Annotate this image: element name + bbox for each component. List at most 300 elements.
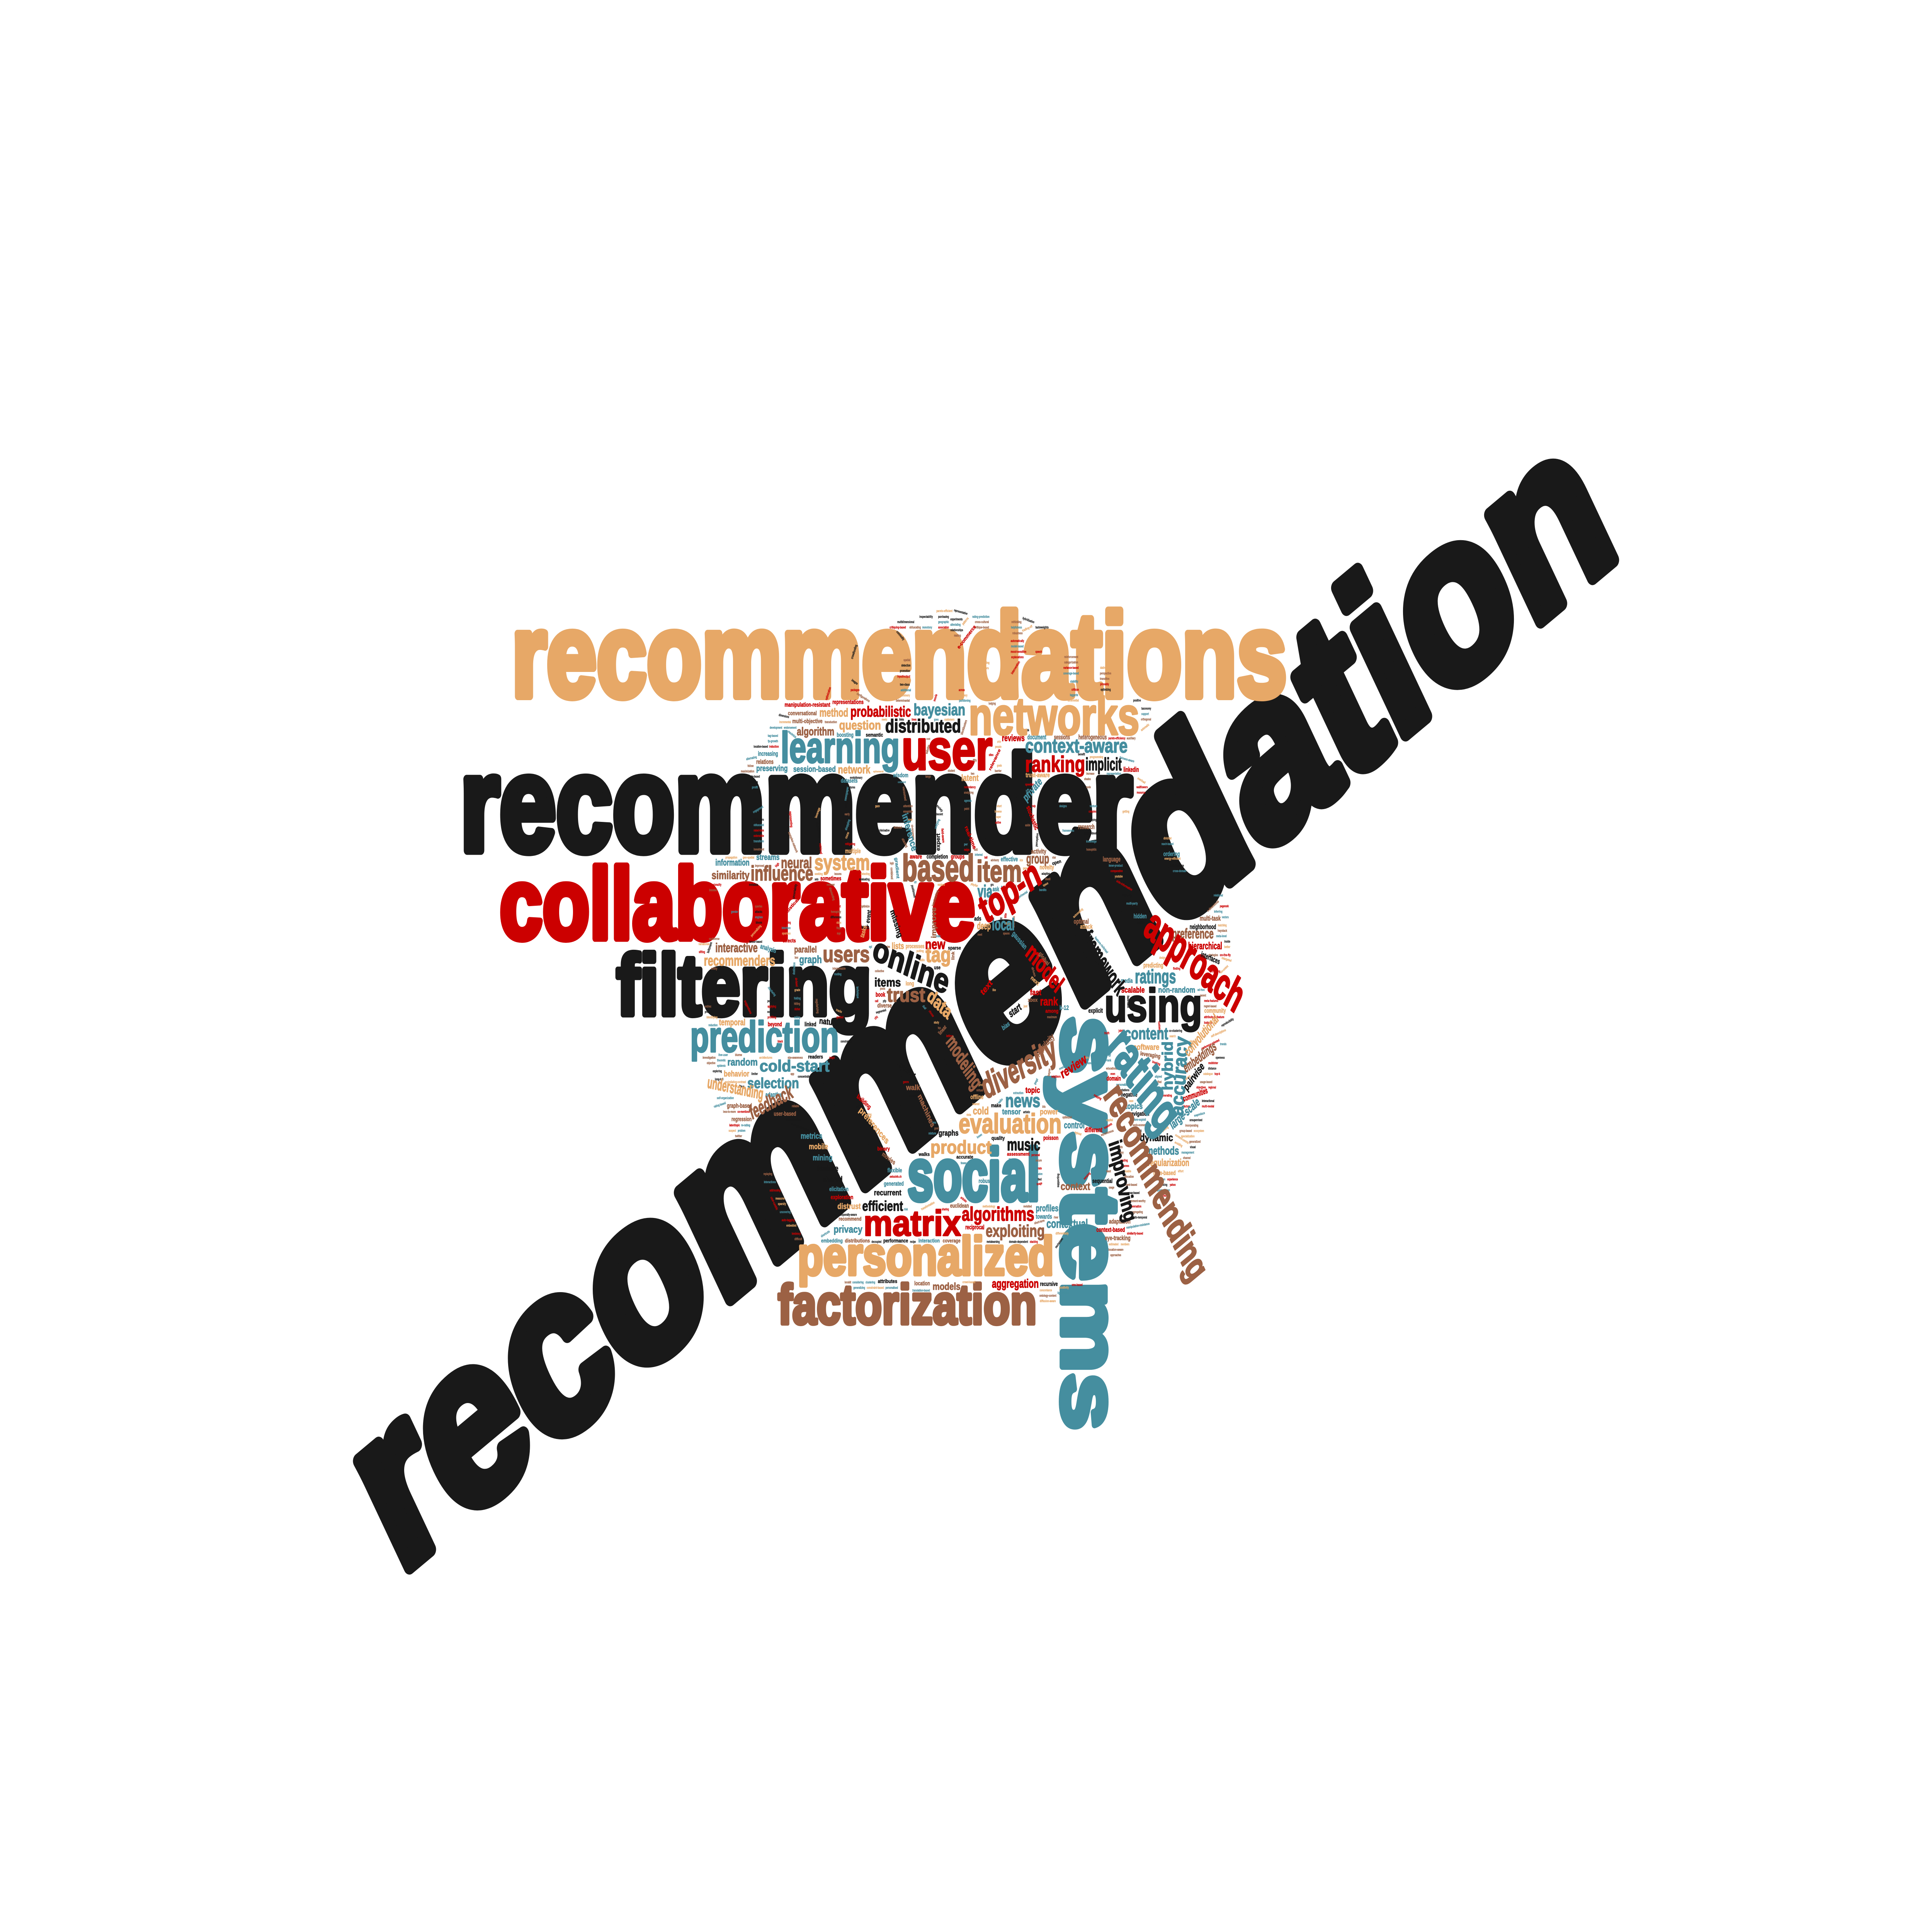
word cloud: small words, upper left: differences xyxy=(830,915,841,919)
word: dynamic: dynamic xyxy=(1140,1132,1173,1143)
word cloud: small words, lower right: known xyxy=(976,1133,983,1139)
word cloud: small words, upper left: mpr xyxy=(837,932,841,935)
word cloud: small words, upper right: hidden xyxy=(1134,913,1147,920)
word: start: start xyxy=(1007,1001,1023,1020)
word cloud: small words, upper left: attacking xyxy=(901,837,909,848)
word cloud: small words, lower right: navigation xyxy=(1129,1111,1149,1117)
word cloud: small words, upper left: monotony xyxy=(922,625,932,629)
word cloud: small words, upper left: meta-product xyxy=(844,793,852,808)
word cloud: small words, upper right: gru xyxy=(991,883,994,887)
word cloud: small words, upper left: sets xyxy=(815,877,818,881)
word cloud: small words, upper right: multi-task xyxy=(1200,915,1221,922)
word: ranking: ranking xyxy=(1025,752,1085,777)
word cloud: small words, upper left: lessons xyxy=(834,872,842,876)
word cloud: small words, lower right: short-term xyxy=(1034,1218,1045,1225)
word cloud: small words, upper left: effects xyxy=(783,937,796,944)
word: gaussian: gaussian xyxy=(1011,929,1028,951)
word cloud: small words, upper right: getting xyxy=(1122,810,1129,813)
word cloud: small words, lower right: customary xyxy=(1158,1021,1162,1033)
word cloud: small words, lower right: interactional xyxy=(1202,1099,1214,1103)
word cloud: small words, lower right: socio-economic xyxy=(1133,1123,1148,1127)
word: influence: influence xyxy=(751,862,813,885)
word cloud: small words, upper right: bandits xyxy=(1039,888,1046,892)
word: non-random: non-random xyxy=(1158,985,1195,995)
word cloud: small words, lower left: regression xyxy=(731,1116,752,1123)
word cloud: small words, lower left: blurme xyxy=(735,1053,742,1057)
word cloud: small words, upper right: energy-efficient xyxy=(1164,857,1180,861)
word cloud: small words, upper right: dwell xyxy=(1045,877,1051,881)
word: regularization: regularization xyxy=(1148,1157,1189,1168)
word cloud: small words, lower right: joint xyxy=(1118,1029,1123,1032)
word cloud: small words, lower right: factors xyxy=(1184,1104,1190,1108)
word cloud: small words, lower right: estimated xyxy=(1109,1242,1119,1246)
word cloud: small words, upper right: frameworks xyxy=(1063,828,1074,832)
word cloud: small words, lower right: games xyxy=(1123,1164,1129,1168)
word cloud: small words, upper left: homophily xyxy=(831,910,841,914)
word cloud: small words, upper left: personalizing xyxy=(750,924,762,937)
word cloud: small words, lower right: context-based xyxy=(1096,1226,1125,1233)
word: scalable: scalable xyxy=(1121,985,1145,995)
word cloud: small words, upper left: inspectability xyxy=(919,615,933,619)
word cloud: small words, lower right: preference-oriented xyxy=(1201,1038,1220,1051)
word cloud: small words, lower right: artistic xyxy=(1023,1110,1030,1114)
word cloud: small words, upper right: experimental xyxy=(1015,890,1028,900)
word cloud: small words, upper right: research xyxy=(1078,823,1095,831)
word cloud: small words, lower right: pairs xyxy=(1084,1055,1089,1060)
word cloud: small words, lower left: link xyxy=(951,951,956,960)
word cloud: small words, lower right: regional xyxy=(1208,1085,1216,1089)
word cloud: small words, lower right: regret-based xyxy=(1204,1004,1216,1008)
word cloud: small words, lower right: channel xyxy=(1183,1156,1190,1160)
word cloud: small words, lower left: rating-based xyxy=(713,1101,726,1109)
word cloud: small words, upper left: automatically xyxy=(1011,639,1024,643)
word cloud: small words, upper right: help xyxy=(1032,804,1036,808)
word: communities: communities xyxy=(1182,1086,1209,1104)
word cloud: small words, upper left: trading-off xyxy=(1021,624,1033,633)
word cloud: small words, lower right: nearest xyxy=(973,1102,980,1106)
word cloud: small words, upper left: optimization xyxy=(824,687,832,701)
word cloud: small words, lower right: ad-hoc xyxy=(1197,988,1205,992)
word cloud: small words, lower left: putting xyxy=(917,949,924,953)
word cloud: small words, upper right: goals xyxy=(997,763,1002,767)
word: system: system xyxy=(815,850,870,875)
word cloud: small words, lower left: limiter xyxy=(752,1072,758,1076)
word cloud: small words, upper left: seeking xyxy=(815,872,823,876)
word cloud: small words, lower right: towards xyxy=(1036,1213,1052,1220)
word cloud: small words, upper right: taxonomy xyxy=(1141,706,1151,711)
word cloud: small words, lower right: effort xyxy=(1178,1169,1184,1173)
word cloud: small words, lower left: tendency xyxy=(792,1231,801,1236)
word cloud: small words, lower right: location-aware xyxy=(1108,1247,1123,1252)
word cloud: small words, lower left: self-organization xyxy=(717,1096,734,1100)
word cloud: small words, lower left: genre xyxy=(903,1080,909,1084)
word: next: next xyxy=(1030,974,1041,987)
word cloud: small words, lower right: catalogue xyxy=(1203,1072,1213,1076)
word cloud: small words, upper left: classification xyxy=(815,822,822,838)
word cloud: small words, upper right: people xyxy=(995,745,1002,749)
word cloud: small words, lower right: valuable xyxy=(1123,1169,1131,1173)
word: review: review xyxy=(1059,1052,1088,1082)
word: cold-start: cold-start xyxy=(760,1057,830,1075)
word: rank: rank xyxy=(1040,995,1058,1008)
word cloud: small words, upper left: increasing xyxy=(758,750,778,757)
word cloud: small words, lower left: tracks xyxy=(835,1008,843,1014)
word cloud: small words, lower left: mixture xyxy=(929,1131,936,1135)
word cloud: small words, upper left: spatial xyxy=(903,658,910,662)
word: filtering: filtering xyxy=(616,937,871,1033)
word cloud: small words, lower left: city xyxy=(873,1015,879,1020)
word cloud: small words, upper left: mitigating xyxy=(845,842,855,846)
word cloud: small words, upper right: youtube xyxy=(1115,874,1123,878)
word cloud: small words, lower left: regularizing xyxy=(815,998,820,1014)
word: temporal: temporal xyxy=(719,1017,745,1027)
word cloud: small words, lower right: generalized xyxy=(1189,1139,1201,1144)
word cloud: small words, upper left: wisdom xyxy=(893,772,908,779)
word cloud: small words, upper left: additional xyxy=(901,688,911,692)
word cloud: small words, upper left: combined xyxy=(890,867,894,879)
word cloud: small words, upper left: vacuumed xyxy=(902,786,908,801)
word: mobile: mobile xyxy=(809,1143,828,1151)
word cloud: small words, lower right: item-based xyxy=(1153,1170,1176,1177)
word cloud: small words, upper right: node xyxy=(1086,785,1091,789)
word cloud: small words, lower right xyxy=(959,966,1235,1303)
word cloud: small words, upper right: debiasing xyxy=(1122,893,1132,897)
word cloud: small words, upper left: two-class xyxy=(900,682,910,686)
word cloud: small words, lower right: methodology xyxy=(983,1204,995,1208)
word cloud: small words, lower left: products xyxy=(705,1010,713,1014)
word: implicit: implicit xyxy=(1085,754,1122,774)
word cloud: small words, lower right: truth xyxy=(1104,1031,1109,1035)
word cloud: small words, upper left: explore xyxy=(938,883,945,886)
word cloud: small words, lower left: suggestions xyxy=(743,1000,753,1015)
word cloud: small words, lower right: experience xyxy=(1167,1177,1178,1181)
word: matrix: matrix xyxy=(864,1203,961,1243)
word cloud: small words, upper right: differential xyxy=(1068,698,1079,702)
word: embeddings: embeddings xyxy=(1181,1038,1218,1076)
word cloud: small words, lower right: robust xyxy=(979,1178,991,1185)
word cloud: small words, lower left: user-centric xyxy=(770,1196,779,1211)
word cloud: small words, lower left: interaction xyxy=(918,1237,940,1243)
word cloud: small words, lower left: guided xyxy=(837,1015,844,1019)
word cloud: small words, upper right: star xyxy=(1052,855,1056,859)
word cloud: small words, lower left: study xyxy=(934,1020,939,1024)
word cloud: small words, upper left: configurations xyxy=(856,692,871,703)
word cloud: small words, upper right: comparative xyxy=(1111,869,1123,873)
word cloud: small words, upper right: domain-aware xyxy=(1170,864,1184,867)
word cloud: small words, upper left: commodity xyxy=(895,630,905,641)
word cloud: small words, upper right: side-information xyxy=(1116,879,1133,892)
word cloud: small words, lower right: talking xyxy=(1135,1128,1141,1133)
word cloud: small words, lower left: ale-based xyxy=(794,978,799,987)
word cloud: small words, lower right: lightweight xyxy=(1058,1291,1069,1295)
word cloud: small words, lower right: assignment xyxy=(1088,1061,1099,1065)
word cloud: small words, lower left: exploration xyxy=(831,1194,853,1201)
word: software: software xyxy=(1133,1043,1159,1052)
word cloud: small words, upper left: tasteweights xyxy=(1036,625,1049,629)
word: recommending: recommending xyxy=(1097,1075,1216,1289)
word: methods: methods xyxy=(1146,1145,1179,1157)
word cloud: small words, lower right: poisson xyxy=(1043,1135,1058,1141)
word cloud: small words, lower left: swissinfo.ch xyxy=(889,1175,901,1179)
word cloud: small words, upper right: venture xyxy=(1090,804,1097,808)
word: exploiting: exploiting xyxy=(986,1222,1045,1240)
word cloud: small words, lower right: spotting xyxy=(1160,1125,1169,1133)
word cloud: small words, upper left: making xyxy=(954,633,961,637)
word cloud: small words, lower right: maximum xyxy=(1047,1015,1057,1019)
word cloud: small words, upper right: perspective xyxy=(1100,671,1111,675)
word cloud: small words, lower right: budgets xyxy=(1204,1020,1212,1024)
word: new: new xyxy=(925,937,946,952)
word cloud: small words, lower left: embedding xyxy=(821,1237,843,1243)
word: neural: neural xyxy=(781,855,812,872)
word cloud: small words, lower left: technique xyxy=(855,986,860,998)
word cloud: small words, upper left: incremental xyxy=(779,720,791,724)
word cloud: small words, lower right: comment-worthy xyxy=(1129,1199,1146,1203)
word cloud: small words, upper right: attack xyxy=(1080,923,1093,930)
word cloud: small words, lower right: spatio-temporal xyxy=(1131,1215,1147,1219)
word cloud: small words, lower right: neglected xyxy=(1074,1130,1082,1136)
word cloud: small words, upper left: shopping xyxy=(844,819,851,831)
word cloud: small words, lower left: less-is-more xyxy=(723,1110,736,1114)
word: context-aware: context-aware xyxy=(1025,735,1128,757)
word cloud: small words, lower left: generated xyxy=(884,1180,904,1187)
word cloud: small words, upper left: editing xyxy=(983,661,990,665)
word cloud: small words, lower left: lenskit xyxy=(845,1280,851,1284)
word: networks: networks xyxy=(969,687,1139,746)
word cloud: small words, lower left: profiling xyxy=(767,1015,776,1019)
word: hierarchical: hierarchical xyxy=(1188,941,1222,952)
word cloud: small words, upper left: branded xyxy=(709,888,717,892)
word cloud: small words, upper left: rule-based xyxy=(750,774,760,778)
word cloud: small words, upper left: evaluating xyxy=(859,877,870,881)
word cloud: small words, upper left: input/output xyxy=(897,674,910,678)
word cloud: small words, upper right: positive xyxy=(1133,698,1141,702)
word: content: content xyxy=(1124,1024,1168,1043)
word: music: music xyxy=(1007,1135,1040,1154)
word cloud: small words, upper left: e-commerce xyxy=(956,624,977,650)
word cloud: small words, lower right: image xyxy=(1036,1181,1043,1186)
word cloud: small words, lower left: objective xyxy=(707,1061,715,1065)
word cloud: small words, lower right: breaking xyxy=(1152,1060,1161,1066)
word cloud: small words, upper left: websites xyxy=(925,744,930,755)
word cloud: small words, lower right: yahoo xyxy=(1170,1183,1176,1187)
word cloud: small words, lower right: aggregating xyxy=(1131,1210,1143,1214)
word cloud: small words, lower left: concentration xyxy=(798,1075,811,1078)
word cloud: small words, upper right: heterogeneous xyxy=(1078,733,1107,741)
word cloud: small words, lower left: live-user xyxy=(718,1053,728,1057)
word cloud: small words, upper right: multi-party xyxy=(1126,901,1138,905)
word cloud: small words, lower left: call xyxy=(875,999,878,1003)
word: news: news xyxy=(1005,1090,1040,1111)
word cloud: small words, upper left: taper xyxy=(907,818,913,821)
word cloud: small words, upper left: obfuscated xyxy=(753,823,764,827)
word cloud: small words, upper left: partitioning xyxy=(959,699,971,702)
word cloud: small words, lower right: leveraging xyxy=(1140,1050,1161,1060)
word cloud: small words, lower left: parameter-free xyxy=(786,1118,801,1122)
word cloud: small words, lower right: community xyxy=(1204,1008,1226,1014)
word cloud: small words, upper right: strategies xyxy=(1208,953,1218,957)
word cloud: small words, upper left: sizes xyxy=(837,921,841,925)
word cloud: small words, upper left: pushbroom xyxy=(910,884,917,898)
word cloud: small words, upper right: behavioral xyxy=(1006,884,1016,888)
word cloud: small words, upper right: homophilic xyxy=(1086,847,1097,852)
word: systems: systems xyxy=(1045,1016,1135,1430)
word cloud: small words, lower left: excuseme xyxy=(767,1010,777,1014)
word: walk: walk xyxy=(906,1084,920,1092)
word cloud: small words, upper right: p2p xyxy=(997,740,1001,743)
word cloud: small words, lower left: entity xyxy=(711,967,717,971)
word cloud: small words, lower left: letting xyxy=(946,1034,952,1038)
word cloud: small words, upper left: reviewer xyxy=(827,883,835,886)
word: session-based: session-based xyxy=(793,764,836,774)
word cloud: small words, lower left: fewer xyxy=(961,1161,967,1165)
word cloud: small words, upper right: additive xyxy=(1137,920,1145,924)
word cloud: small words, lower left: latenttopic xyxy=(729,1123,740,1127)
word cloud: small words, lower right: virtual xyxy=(976,1088,983,1092)
word cloud: small words, lower left: long-tail xyxy=(715,1077,723,1081)
word cloud: small words, upper left: errors xyxy=(983,666,989,670)
word cloud: small words, upper right: reinforcement xyxy=(1064,655,1078,659)
word cloud: small words, upper right: paper xyxy=(996,815,1001,819)
word cloud: small words, lower left: personalised xyxy=(886,1286,898,1289)
word cloud: small words, upper left: playlist xyxy=(970,882,978,888)
word cloud: small words, upper right: like xyxy=(992,988,996,992)
word cloud: small words, lower right: explicit xyxy=(1088,1008,1103,1014)
word cloud: small words, lower right: objectives xyxy=(1196,1085,1206,1089)
word cloud: small words, upper left: descent xyxy=(936,812,943,816)
word cloud: small words, upper right: chief xyxy=(1103,947,1109,954)
word: user: user xyxy=(901,718,992,782)
word cloud: small words, lower right: distance xyxy=(1208,1066,1216,1070)
word cloud: small words, lower right: mapping xyxy=(1093,1093,1102,1101)
word cloud: small words, upper right: title xyxy=(1003,913,1007,918)
word cloud: small words, upper left: innovators xyxy=(753,818,764,821)
word cloud: small words, lower left: walks xyxy=(918,1151,930,1157)
word cloud: small words, lower right: concordance xyxy=(1039,1288,1052,1292)
word cloud: small words, upper right: provably xyxy=(1100,682,1109,686)
word: social: social xyxy=(907,1134,1040,1216)
word cloud: small words, upper right: fifty xyxy=(973,758,977,762)
word cloud: small words, lower left: reliable xyxy=(792,1104,799,1108)
word cloud: small words, upper left: queries xyxy=(755,904,762,908)
word cloud: small words, upper left: extensible xyxy=(753,834,764,838)
word cloud: small words, upper right: adapting xyxy=(1042,872,1050,876)
word: deep: deep xyxy=(977,920,991,932)
word: stochastic: stochastic xyxy=(1025,804,1040,832)
word: event: event xyxy=(864,909,872,924)
word cloud: small words, upper right: inferring xyxy=(1214,910,1223,913)
word cloud: small words, upper left: mood-sensitive xyxy=(1011,650,1026,654)
word cloud: small words, upper left: gaze xyxy=(875,804,880,808)
word cloud: small words, upper left: conversational xyxy=(788,710,817,717)
word cloud: small words, lower left: difficult xyxy=(794,1237,802,1241)
word cloud: small words, upper right: language xyxy=(1103,855,1121,863)
word cloud: small words, upper left: complex-network xyxy=(787,831,799,853)
word cloud: small words, upper left: aware xyxy=(910,854,922,860)
word cloud: small words, lower right: eye-tracking xyxy=(1105,1235,1131,1242)
word cloud: small words, lower left: interpretable xyxy=(832,967,845,971)
word cloud: small words, upper left: dimensions xyxy=(779,713,789,719)
word cloud: small words, upper right: wallflowers xyxy=(1136,785,1148,789)
word cloud: small words, upper left: attention xyxy=(903,804,913,808)
word cloud: small words, lower right: management xyxy=(1182,1150,1194,1155)
word cloud: small words, upper right: haystack xyxy=(1218,929,1227,932)
word: aggregation: aggregation xyxy=(992,1277,1039,1291)
word cloud: small words, lower right: rate xyxy=(1038,1166,1042,1170)
word: prediction: prediction xyxy=(690,1013,839,1061)
word cloud: small words, lower right: way xyxy=(1133,1053,1137,1057)
word cloud: small words, upper left: scale xyxy=(936,934,940,938)
word: analysis: analysis xyxy=(760,943,777,955)
word cloud: small words, upper right: inner-product xyxy=(1109,864,1123,867)
word cloud: small words, lower right: among xyxy=(1045,1008,1058,1014)
word: approach: approach xyxy=(1138,898,1252,1022)
word: relations: relations xyxy=(756,759,774,765)
word cloud: small words, lower left: temporally-aware xyxy=(839,1213,857,1216)
word cloud: small words, lower left: embedded xyxy=(786,1223,796,1228)
word cloud: small words, lower left: blog xyxy=(867,1112,872,1116)
word cloud: small words, lower right: supporting xyxy=(1056,1173,1060,1187)
word cloud: small words, upper left: cross-cultural xyxy=(975,620,989,624)
word: contextual: contextual xyxy=(1046,1217,1088,1231)
word cloud: small words, upper right: predicting xyxy=(1143,961,1163,969)
word cloud: small words, upper right: complex xyxy=(1088,810,1096,813)
word cloud: small words, upper left: promotion xyxy=(900,669,910,673)
word: factorization: factorization xyxy=(778,1274,1037,1336)
word cloud: small words, upper right: categorization xyxy=(1064,660,1078,664)
word cloud: small words, lower left: reduction xyxy=(708,1023,718,1027)
word: items: items xyxy=(874,975,901,989)
word: local: local xyxy=(992,915,1015,934)
word: via: via xyxy=(978,882,992,901)
word cloud: small words, lower right: tied xyxy=(1038,1177,1042,1181)
word cloud: small words, lower right: topic xyxy=(1026,1086,1040,1095)
word: similarity: similarity xyxy=(711,869,750,882)
word cloud: small words, upper right: benefit xyxy=(1078,752,1085,756)
word cloud: small words, lower right: asynchronous xyxy=(1100,1128,1114,1137)
word cloud: small words, upper right: activity xyxy=(1031,848,1046,855)
word cloud: small words, upper right: inferred xyxy=(975,852,983,857)
word cloud: small words, lower left: sgd xyxy=(869,945,872,949)
word cloud: small words, upper right: driven xyxy=(1031,966,1037,977)
word cloud: small words, lower left: collective xyxy=(875,969,884,973)
word cloud: small words, upper left: critique-based xyxy=(975,625,989,629)
word cloud: small words, upper right: vectors xyxy=(1222,915,1229,919)
word cloud: small words, lower right: visual xyxy=(1190,1145,1196,1149)
word cloud: small words, lower right: content-centric xyxy=(1175,1133,1190,1145)
word cloud: small words, upper left: images xyxy=(851,678,859,685)
word cloud: small words, lower right: query-driven xyxy=(1157,1188,1170,1192)
word cloud: small words, lower left: segmented xyxy=(875,1008,886,1014)
word: missing: missing xyxy=(889,908,904,939)
word: text: text xyxy=(979,978,994,997)
word cloud: small words, lower left: graph-based xyxy=(727,1102,752,1109)
word cloud: small words, upper left: flops xyxy=(837,926,841,930)
word cloud: small words, lower right: many xyxy=(1118,1150,1124,1155)
word cloud: small words, upper left: crowdfunding xyxy=(850,644,858,660)
word cloud: small words, lower right: parent xyxy=(1200,993,1206,997)
word cloud: small words, lower left: accurate xyxy=(956,1154,973,1160)
word cloud: small words, upper left: explanations xyxy=(1011,655,1024,659)
word: evaluation: evaluation xyxy=(959,1108,1061,1139)
word: preference: preference xyxy=(1172,926,1214,942)
word cloud: small words, upper right: size xyxy=(1020,858,1023,862)
word cloud: small words, upper right: agenda xyxy=(964,799,971,803)
word cloud: small words, upper right: support xyxy=(1141,712,1149,716)
word cloud: small words, upper left: co-occurrence xyxy=(910,825,915,840)
word: improving: improving xyxy=(1105,1137,1141,1225)
word cloud: small words, lower right: bits xyxy=(1119,1145,1123,1149)
